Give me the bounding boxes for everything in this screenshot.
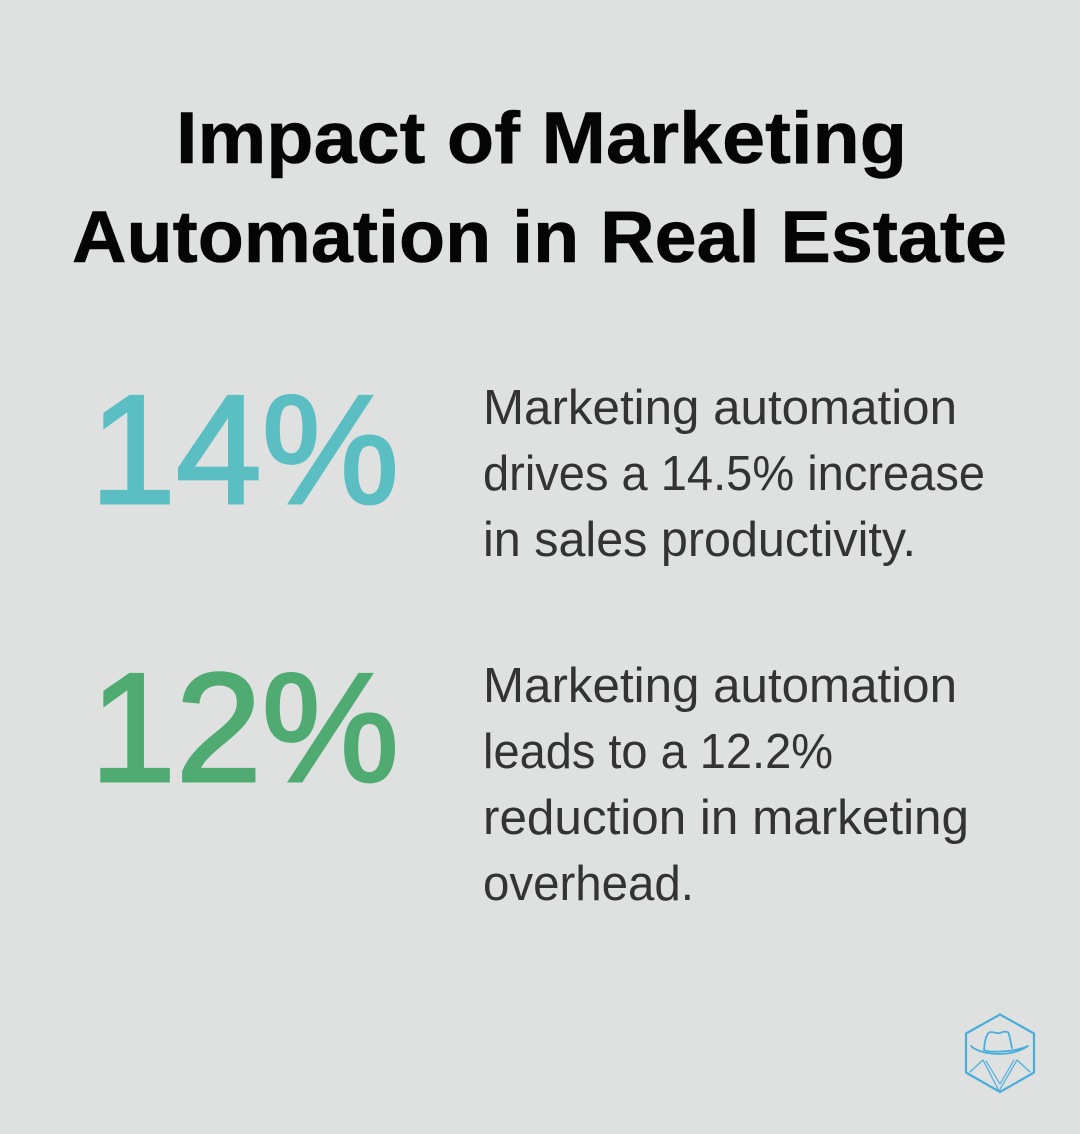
stat: 12%: 12% xyxy=(90,641,399,814)
text block: marketing overhead: leads to a 12.2% xyxy=(483,725,833,779)
panel: marketing overhead stat xyxy=(90,641,969,911)
stat: 14%: 14% xyxy=(90,363,399,536)
title xyxy=(72,98,1007,278)
title: Impact of Marketing xyxy=(176,98,907,179)
text block: marketing overhead: reduction in marketing xyxy=(483,791,969,845)
panel: sales productivity stat xyxy=(90,363,985,567)
text block: sales productivity xyxy=(483,381,985,567)
text block: sales productivity: drives a 14.5% increase xyxy=(483,447,985,501)
text block: sales productivity: in sales productivity. xyxy=(483,513,916,567)
title: Automation in Real Estate xyxy=(72,197,1007,278)
text block: marketing overhead xyxy=(483,659,969,911)
icon: logo hexagon with hat and spy figure xyxy=(966,1014,1034,1092)
text block: marketing overhead: Marketing automation xyxy=(483,659,957,713)
text block: sales productivity: Marketing automation xyxy=(483,381,957,435)
text block: marketing overhead: overhead. xyxy=(483,857,694,911)
